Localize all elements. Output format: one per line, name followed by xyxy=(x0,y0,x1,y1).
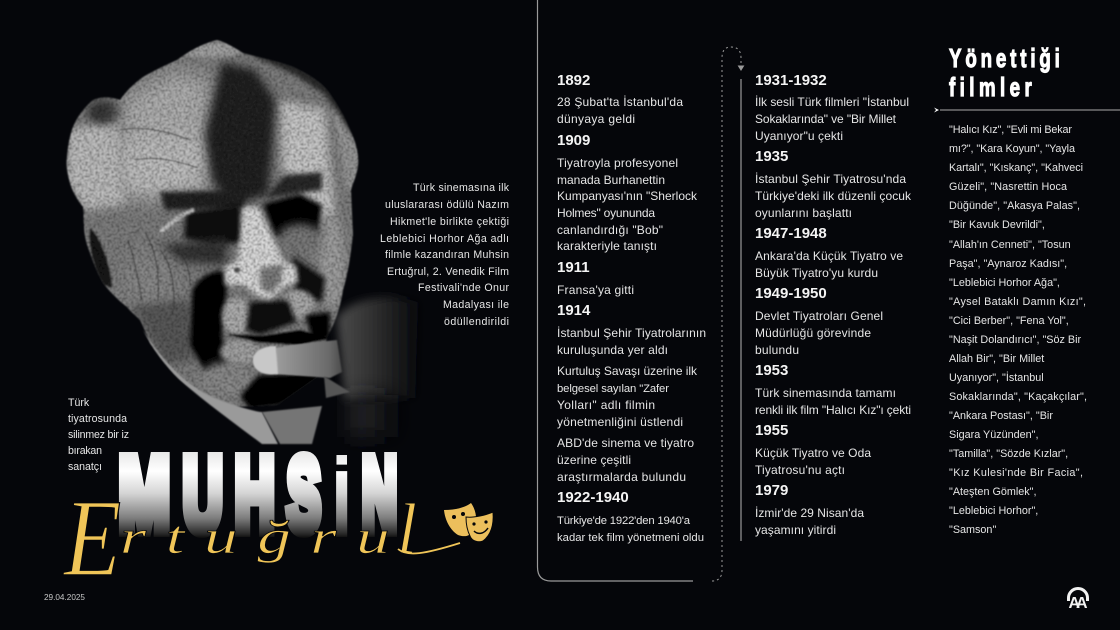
heading: directed films: Yönettiği xyxy=(949,43,1060,73)
timeline column 1: 1911 xyxy=(557,259,590,276)
directed films list: "Aysel Bataklı Damın Kızı", xyxy=(949,296,1086,308)
timeline column 2 xyxy=(755,72,912,537)
ear xyxy=(90,228,112,288)
title: Ertuğrul: rtuğru xyxy=(120,510,409,564)
timeline column 1: İstanbul Şehir Tiyatrolarının xyxy=(557,326,706,340)
timeline column 1: Holmes" oyununda xyxy=(557,206,655,220)
intro text: Venice award: ödüllendirildi xyxy=(444,316,509,328)
upper lip xyxy=(222,298,250,334)
timeline column 1: kadar tek film yönetmeni oldu xyxy=(557,532,704,544)
intro text: Venice award: Festivali'nde Onur xyxy=(418,282,509,294)
icon: theatre masks xyxy=(444,503,493,542)
right eye xyxy=(263,194,322,245)
collar xyxy=(143,330,350,444)
intro text: Venice award: Leblebici Horhor Ağa adlı xyxy=(380,233,509,245)
lower lip xyxy=(220,340,260,364)
timeline column 2: 1955 xyxy=(755,422,788,439)
title: Muhsin: M xyxy=(119,436,170,552)
title: Muhsin xyxy=(119,436,397,558)
directed films list: Sokaklarında", "Kaçakçılar", xyxy=(949,391,1087,403)
timeline column 2: 1931-1932 xyxy=(755,72,827,89)
timeline column 2: yaşamını yitirdi xyxy=(755,523,836,537)
timeline column 2: 1947-1948 xyxy=(755,225,827,242)
title: Ertuğrul: l xyxy=(397,489,417,569)
thumb and finger xyxy=(253,340,342,378)
directed films list: Uyanıyor", "İstanbul xyxy=(949,371,1044,384)
timeline column 1: 1914 xyxy=(557,302,591,319)
intro text: Venice award: Hikmet'le birlikte çektiği xyxy=(390,216,509,228)
hand behind chin xyxy=(337,297,418,400)
timeline column 2: İstanbul Şehir Tiyatrosu'nda xyxy=(755,172,906,186)
directed films list: Düğünde", "Akasya Palas", xyxy=(949,200,1080,212)
timeline column 2: Uyanıyor"u çekti xyxy=(755,129,843,143)
timeline column 1: Fransa'ya gitti xyxy=(557,283,634,297)
timeline column 1: araştırmalarda bulundu xyxy=(557,470,686,484)
timeline column 1: Türkiye'de 1922'den 1940'a xyxy=(557,515,691,527)
timeline column 2: Tiyatrosu'nu açtı xyxy=(755,463,845,477)
forehead light xyxy=(120,70,212,195)
intro text: Venice award: Madalyası ile xyxy=(443,299,509,311)
intro text: Venice award xyxy=(380,182,510,328)
timeline column 1: 1922-1940 xyxy=(557,489,629,506)
directed films list: Sigara Yüzünden", xyxy=(949,429,1038,441)
timeline column 1: dünyaya geldi xyxy=(557,112,635,126)
directed films list: "Samson" xyxy=(949,524,996,536)
directed films list: Güzeli", "Nasrettin Hoca xyxy=(949,181,1067,193)
title: Muhsin: S xyxy=(287,439,321,553)
timeline column 2: Müdürlüğü görevinde xyxy=(755,326,871,340)
intro text: theatre xyxy=(68,397,129,473)
intro text: theatre: bırakan xyxy=(68,445,102,457)
directed films list: mı?", "Kara Koyun", "Yayla xyxy=(949,143,1075,155)
right nose shadow xyxy=(292,256,325,302)
heading: directed films: filmler xyxy=(949,72,1032,102)
title: Muhsin: H xyxy=(235,438,274,552)
directed films list: "Ankara Postası", "Bir xyxy=(949,410,1053,422)
timeline column 2: 1935 xyxy=(755,148,788,165)
left moustache shadow xyxy=(190,271,228,372)
timeline column 1: belgesel sayılan "Zafer xyxy=(557,383,669,395)
timeline column 1: Kumpanyası'nın "Sherlock xyxy=(557,189,698,203)
title: Muhsin: N xyxy=(362,438,397,553)
intro text: Venice award: Türk sinemasına ilk xyxy=(413,182,510,194)
intro text: Venice award: Ertuğrul, 2. Venedik Film xyxy=(387,266,509,278)
intro text: theatre: silinmez bir iz xyxy=(68,429,129,441)
left hair xyxy=(66,120,125,210)
hair top and right xyxy=(246,54,352,136)
timeline frame xyxy=(538,0,744,581)
timeline column 1 xyxy=(557,72,706,544)
timeline column 2: 1949-1950 xyxy=(755,285,827,302)
timeline column 2: Küçük Tiyatro ve Oda xyxy=(755,446,871,460)
timeline column 2: Türk sinemasında tamamı xyxy=(755,386,896,400)
timeline column 2: renkli ilk film "Halıcı Kız"ı çekti xyxy=(755,403,911,417)
moustache xyxy=(246,300,296,335)
timeline column 1: Kurtuluş Savaşı üzerine ilk xyxy=(557,364,698,378)
directed films list: "Ateşten Gömlek", xyxy=(949,486,1036,498)
directed films list: "Kız Kulesi'nde Bir Facia", xyxy=(949,467,1083,479)
timeline column 1: yönetmenliğini üstlendi xyxy=(557,415,683,429)
timeline column 2: Ankara'da Küçük Tiyatro ve xyxy=(755,249,903,263)
timeline column 1: ABD'de sinema ve tiyatro xyxy=(557,436,694,450)
chin xyxy=(200,362,252,398)
directed films list: "Leblebici Horhor", xyxy=(949,505,1038,517)
timeline column 1: kuruluşunda yer aldı xyxy=(557,343,668,357)
timeline column 2: İlk sesli Türk filmleri "İstanbul xyxy=(755,95,909,109)
under eye xyxy=(158,238,228,265)
timeline column 2: 1953 xyxy=(755,362,788,379)
date: 29.04.2025 xyxy=(44,593,85,602)
timeline column 1: 1909 xyxy=(557,132,590,149)
logo: AA: AA xyxy=(1068,595,1088,612)
timeline column 2: Sokaklarında" ve "Bir Millet xyxy=(755,112,897,126)
intro text: theatre: Türk xyxy=(68,397,90,409)
timeline column 1: 1892 xyxy=(557,72,590,89)
cheek wrinkles xyxy=(120,128,330,310)
timeline column 2: Devlet Tiyatroları Genel xyxy=(755,309,883,323)
grain xyxy=(66,40,358,407)
timeline column 1: karakteriyle tanıştı xyxy=(557,239,657,253)
directed films list: "Allah'ın Cenneti", "Tosun xyxy=(949,239,1071,251)
directed films list: Paşa", "Aynaroz Kadısı", xyxy=(949,258,1067,270)
timeline column 1: Yolları" adlı filmin xyxy=(557,398,655,412)
signature tail xyxy=(398,543,460,554)
directed films list: "Tamilla", "Sözde Kızlar", xyxy=(949,448,1068,460)
intro text: Venice award: uluslararası ödülü Nazım xyxy=(385,199,509,211)
directed films list: "Bir Kavuk Devrildi", xyxy=(949,219,1045,231)
timeline column 2: oyunlarını başlattı xyxy=(755,206,852,220)
left eye xyxy=(184,205,242,246)
timeline column 2: bulundu xyxy=(755,343,799,357)
timeline column 2: İzmir'de 29 Nisan'da xyxy=(755,506,864,520)
intro text: theatre: sanatçı xyxy=(68,461,102,473)
title: Ertuğrul xyxy=(62,478,460,600)
timeline column 1: üzerine çeşitli xyxy=(557,453,631,467)
intro text: theatre: tiyatrosunda xyxy=(68,413,127,425)
intro text: Venice award: filmle kazandıran Muhsin xyxy=(385,249,509,261)
timeline column 1: Tiyatroyla profesyonel xyxy=(557,156,678,170)
brows xyxy=(160,190,245,210)
sleeve xyxy=(350,395,396,437)
directed films list: "Cici Berber", "Fena Yol", xyxy=(949,315,1069,327)
directed films list: Kartalı", "Kıskanç", "Kahveci xyxy=(949,162,1083,174)
left cheek xyxy=(124,251,176,319)
timeline column 1: canlandırdığı "Bob" xyxy=(557,223,663,237)
timeline column 1: 28 Şubat'ta İstanbul'da xyxy=(557,95,683,109)
mouth xyxy=(226,330,330,345)
directed films list: Allah Bir", "Bir Millet xyxy=(949,353,1044,365)
timeline column 2: Türkiye'deki ilk düzenli çocuk xyxy=(755,189,912,203)
timeline column 1: manada Burhanettin xyxy=(557,173,665,187)
title: Ertuğrul: E xyxy=(62,478,121,600)
nose ridge xyxy=(224,207,298,300)
title: Muhsin: U xyxy=(183,438,222,552)
portrait photo xyxy=(60,30,418,444)
arrow divider xyxy=(934,108,1120,112)
forehead shadow xyxy=(205,62,275,205)
title: Muhsin: İ xyxy=(331,451,352,558)
directed films list: "Leblebici Horhor Ağa", xyxy=(949,277,1060,289)
right cheek xyxy=(319,214,345,310)
timeline column 2: Büyük Tiyatro'yu kurdu xyxy=(755,266,878,280)
head xyxy=(60,30,370,415)
directed films list xyxy=(949,124,1087,536)
directed films list: "Naşit Dolandırıcı", "Söz Bir xyxy=(949,334,1082,346)
timeline column 2: 1979 xyxy=(755,482,788,499)
heading: directed films xyxy=(949,43,1060,102)
directed films list: "Halıcı Kız", "Evli mi Bekar xyxy=(949,124,1072,136)
